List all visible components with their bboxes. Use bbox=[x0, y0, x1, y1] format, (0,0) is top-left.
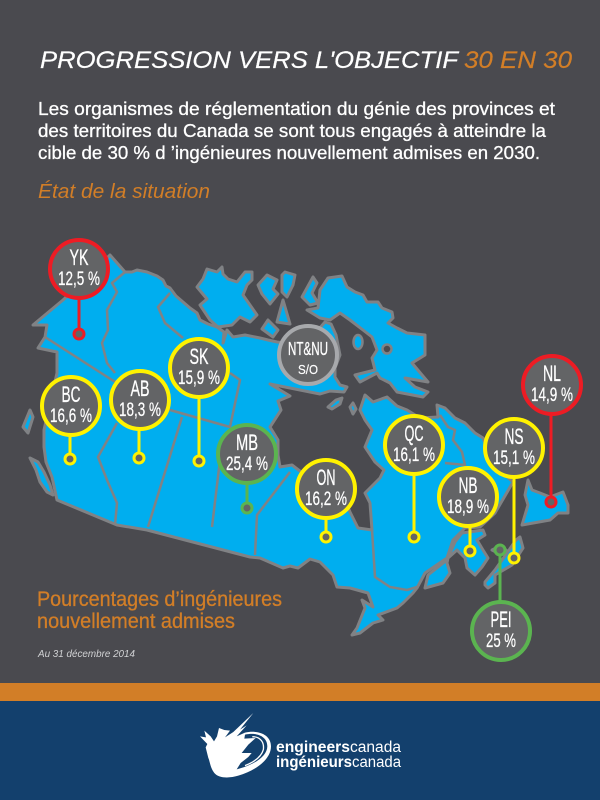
marker: YK bbox=[50, 240, 108, 339]
mainland bbox=[33, 255, 513, 635]
Maritime provinces bbox=[425, 530, 488, 588]
marker: ON: 16,2 % bbox=[305, 489, 347, 510]
marker: NT and NU: NT&NU bbox=[288, 339, 328, 359]
marker: AB: 18,3 % bbox=[119, 400, 161, 421]
date note: Au 31 décembre 2014 bbox=[37, 649, 135, 660]
marker: MB: MB bbox=[236, 430, 258, 455]
subheading: État de la situation bbox=[38, 180, 210, 203]
intro text: des territoires du Canada se sont tous engagés à atteindre la bbox=[38, 120, 547, 141]
title: PROGRESSION VERS L'OBJECTIF bbox=[40, 47, 460, 74]
wordmark: canada bbox=[350, 739, 401, 756]
marker: MB: 25,4 % bbox=[226, 454, 268, 475]
west coast islands bbox=[23, 410, 33, 433]
marker: BC: 16,6 % bbox=[50, 406, 92, 427]
Foxe Basin islands bbox=[354, 335, 362, 349]
logo bbox=[200, 713, 401, 777]
footer band bbox=[0, 701, 600, 800]
marker: SK: 15,9 % bbox=[178, 368, 220, 389]
marker: PEI: PEI bbox=[490, 607, 512, 632]
marker: NS: 15,1 % bbox=[493, 448, 535, 469]
marker: NS: NS bbox=[504, 424, 524, 449]
title: 30 EN 30 bbox=[464, 47, 572, 74]
wordmark: engineers bbox=[276, 739, 350, 756]
Arctic islands bbox=[197, 267, 257, 327]
marker: QC: 16,1 % bbox=[393, 445, 435, 466]
marker: BC: BC bbox=[62, 382, 81, 407]
intro text: Les organismes de réglementation du génie des provinces et bbox=[38, 98, 555, 119]
Baffin Island bbox=[307, 276, 428, 397]
marker: ON: ON bbox=[316, 465, 336, 490]
marker: ON bbox=[297, 460, 355, 542]
marker: AB: AB bbox=[130, 376, 150, 401]
marker: MB bbox=[218, 425, 276, 513]
map of Canada bbox=[23, 255, 568, 635]
marker: BC bbox=[42, 377, 100, 464]
marker: NL bbox=[523, 356, 581, 507]
orange band bbox=[0, 683, 600, 701]
marker: YK: 12,5 % bbox=[58, 269, 100, 290]
intro text bbox=[38, 98, 555, 163]
province borders bbox=[45, 272, 465, 590]
marker: NS bbox=[485, 419, 543, 563]
marker: NB: 18,9 % bbox=[447, 497, 489, 518]
marker: NB bbox=[439, 468, 497, 556]
wordmark bbox=[276, 739, 401, 771]
marker: SK: SK bbox=[190, 344, 209, 369]
marker: NL: 14,9 % bbox=[531, 385, 573, 406]
marker: PEI: 25 % bbox=[486, 631, 516, 652]
icon: maple leaf with swoosh bbox=[200, 713, 271, 777]
intro text: cible de 30 % d ’ingénieures nouvellement admises en 2030. bbox=[38, 142, 540, 163]
marker: AB bbox=[111, 371, 169, 463]
legend heading bbox=[37, 588, 282, 633]
wordmark: canada bbox=[352, 754, 401, 771]
marker: NB: NB bbox=[458, 473, 478, 498]
marker: QC bbox=[385, 416, 443, 542]
marker: NL: NL bbox=[543, 361, 561, 386]
marker: NT and NU bbox=[279, 326, 337, 384]
marker: SK bbox=[170, 339, 228, 466]
marker: QC: QC bbox=[404, 421, 424, 446]
marker: YK: YK bbox=[70, 245, 89, 270]
legend heading: nouvellement admises bbox=[37, 610, 235, 633]
marker: PEI bbox=[472, 545, 530, 660]
marker: NT and NU: S/O bbox=[298, 362, 318, 377]
wordmark: ingénieurs bbox=[276, 754, 352, 771]
legend heading: Pourcentages d’ingénieures bbox=[37, 588, 282, 611]
